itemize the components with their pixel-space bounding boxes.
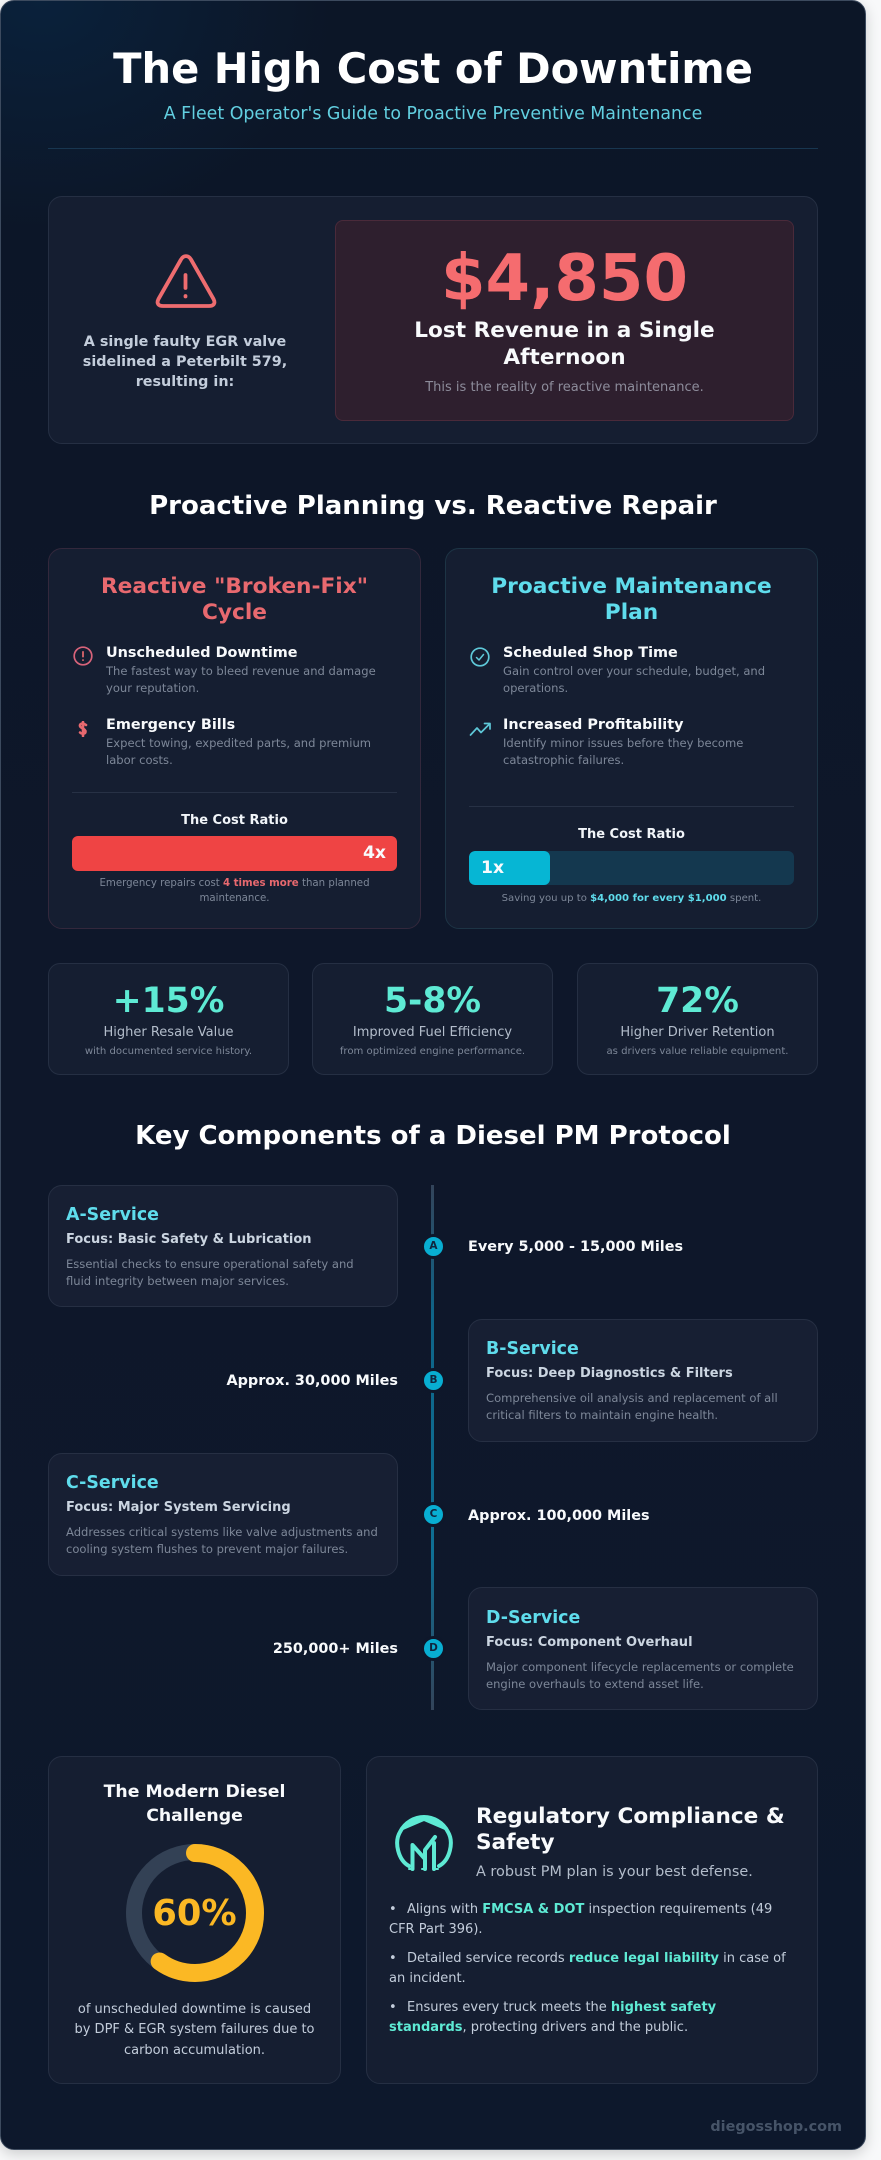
B title: B-Service	[486, 1339, 579, 1359]
C description: cooling system flushes to prevent major failures.	[66, 1542, 348, 1556]
miles C: Approx. 100,000 Miles	[468, 1508, 650, 1524]
donut value: 60%	[152, 1893, 237, 1934]
bar: reactive 4x	[72, 836, 397, 871]
miles D: 250,000+ Miles	[273, 1641, 398, 1657]
node B	[421, 1368, 446, 1393]
retention note: as drivers value reliable equipment.	[606, 1046, 788, 1057]
item: scheduled shop time: Gain control over your schedule, budget, and	[503, 664, 765, 678]
bullet: safety	[389, 2000, 716, 2035]
proactive title	[491, 574, 772, 625]
item: increased profitability: catastrophic failures.	[503, 753, 624, 767]
challenge text: of unscheduled downtime is caused	[78, 2002, 311, 2017]
icon: shield chart	[395, 1815, 453, 1871]
B description: Comprehensive oil analysis and replacement of all	[486, 1390, 778, 1404]
bullet: FMCSA	[389, 1902, 772, 1937]
icon: trend arrow	[470, 722, 491, 736]
A description: fluid integrity between major services.	[66, 1274, 289, 1288]
panel: compliance	[366, 1756, 818, 2084]
item: unscheduled downtime: your reputation.	[106, 681, 199, 695]
icon: alert circle	[73, 646, 93, 666]
heading: PM protocol: Key Components of a Diesel PM Protocol	[135, 1121, 731, 1151]
D title: D-Service	[486, 1608, 580, 1628]
service card C	[48, 1453, 398, 1576]
item: scheduled shop time: operations.	[503, 681, 568, 695]
icon: check circle	[470, 647, 490, 667]
compliance title: Safety	[476, 1830, 555, 1855]
bullet: FMCSA: •	[389, 1902, 397, 1917]
item: increased profitability: Increased Profitability	[503, 717, 683, 733]
item: unscheduled downtime: The fastest way to bleed revenue and damage	[106, 664, 376, 678]
item: emergency bills: labor costs.	[106, 753, 173, 767]
challenge title: The Modern Diesel	[104, 1782, 285, 1802]
stat: retention	[577, 963, 818, 1075]
C title: C-Service	[66, 1473, 159, 1493]
B focus: Focus: Deep Diagnostics & Filters	[486, 1366, 733, 1381]
cost ratio label: The Cost Ratio	[578, 827, 685, 842]
challenge title: Challenge	[146, 1806, 243, 1826]
compliance subtitle: A robust PM plan is your best defense.	[476, 1864, 753, 1880]
stat: fuel	[312, 963, 553, 1075]
bullet: safety: •	[389, 2000, 397, 2015]
reactive caption	[99, 878, 370, 904]
hero case text	[83, 334, 287, 390]
item: increased profitability: Identify minor issues before they become	[503, 736, 743, 750]
footer brand: diegosshop.com	[710, 2119, 842, 2135]
hero case text: resulting in:	[136, 374, 234, 390]
bar: reactive 4x: 4x	[363, 843, 386, 863]
B description: critical filters to maintain engine health.	[486, 1408, 718, 1422]
bullet: liability	[389, 1951, 786, 1986]
hero case text: A single faulty EGR valve	[84, 334, 286, 350]
node A: A	[429, 1240, 438, 1252]
item: emergency bills	[106, 717, 371, 767]
fuel note: from optimized engine performance.	[340, 1046, 525, 1057]
item: increased profitability	[503, 717, 743, 767]
icon: warning triangle	[156, 254, 216, 308]
panel: reactive	[48, 548, 421, 929]
bullet: liability: an incident.	[389, 1971, 466, 1986]
reactive title: Reactive "Broken-Fix"	[101, 574, 368, 599]
service card B	[468, 1319, 818, 1442]
B description	[486, 1390, 778, 1422]
resale note: with documented service history.	[85, 1046, 252, 1057]
compliance list	[389, 1902, 786, 2035]
node B: B	[429, 1374, 438, 1386]
cost ratio label: The Cost Ratio	[181, 813, 288, 828]
retention label: Higher Driver Retention	[620, 1025, 775, 1040]
D description	[486, 1660, 794, 1691]
hero note: This is the reality of reactive maintenance.	[425, 380, 704, 395]
stat: resale	[48, 963, 289, 1075]
bar: proactive 1x: 1x	[481, 858, 504, 878]
proactive title: Plan	[605, 600, 658, 625]
hero label: Lost Revenue in a Single	[414, 318, 715, 343]
challenge text	[74, 2002, 315, 2058]
node C	[421, 1502, 446, 1527]
panel: hero cost	[48, 196, 818, 444]
C focus: Focus: Major System Servicing	[66, 1500, 291, 1515]
node A	[421, 1234, 446, 1259]
bullet: liability: •	[389, 1951, 397, 1966]
miles A: Every 5,000 - 15,000 Miles	[468, 1239, 683, 1255]
D description: engine overhauls to extend asset life.	[486, 1677, 704, 1691]
A focus: Focus: Basic Safety & Lubrication	[66, 1232, 312, 1247]
item: scheduled shop time	[503, 645, 765, 695]
heading: planning vs repair: Proactive Planning vs. Reactive Repair	[149, 491, 717, 521]
challenge text: by DPF & EGR system failures due to	[74, 2022, 315, 2037]
fuel label: Improved Fuel Efficiency	[353, 1025, 512, 1040]
proactive title: Proactive Maintenance	[491, 574, 772, 599]
bullet: safety: Ensures every truck meets the highest safety	[407, 2000, 716, 2015]
service card D	[468, 1587, 818, 1710]
service card A	[48, 1185, 398, 1307]
title: The High Cost of Downtime	[113, 44, 753, 93]
proactive caption: Saving you up to $4,000 for every $1,000 spent.	[502, 893, 761, 904]
reactive caption: Emergency repairs cost 4 times more than planned	[99, 878, 370, 889]
hero label: Afternoon	[503, 344, 626, 370]
D focus: Focus: Component Overhaul	[486, 1635, 693, 1650]
miles B: Approx. 30,000 Miles	[226, 1373, 398, 1389]
item: emergency bills: Emergency Bills	[106, 717, 235, 733]
resale number: +15%	[113, 981, 224, 1021]
retention number: 72%	[656, 981, 739, 1021]
compliance title	[476, 1804, 785, 1855]
reactive caption: maintenance.	[200, 892, 269, 904]
C description: Addresses critical systems like valve adjustments and	[66, 1524, 378, 1538]
challenge title	[104, 1782, 285, 1826]
item: emergency bills: Expect towing, expedited parts, and premium	[106, 736, 371, 750]
panel: lost revenue	[335, 220, 794, 421]
bullet: safety: standards, protecting drivers and the public.	[389, 2020, 688, 2035]
hero label	[414, 318, 715, 370]
item: unscheduled downtime: Unscheduled Downtime	[106, 645, 298, 661]
bullet: FMCSA: Aligns with FMCSA & DOT inspection requirements (49	[407, 1902, 772, 1917]
hero number: $4,850	[441, 242, 688, 316]
node D: D	[429, 1642, 438, 1654]
reactive title	[101, 574, 368, 625]
compliance title: Regulatory Compliance &	[476, 1804, 785, 1829]
challenge text: carbon accumulation.	[124, 2043, 265, 2058]
node C: C	[430, 1508, 437, 1520]
item: unscheduled downtime	[106, 645, 376, 695]
bar: proactive 1x	[469, 851, 794, 885]
donut chart: 60%	[126, 1844, 264, 1982]
panel: proactive	[445, 548, 818, 929]
bullet: liability: Detailed service records reduce legal liability in case of	[407, 1951, 786, 1966]
fuel number: 5-8%	[384, 981, 481, 1021]
resale label: Higher Resale Value	[104, 1025, 233, 1040]
C description	[66, 1524, 378, 1556]
A description	[66, 1256, 354, 1288]
reactive title: Cycle	[202, 600, 267, 625]
D description: Major component lifecycle replacements or complete	[486, 1660, 794, 1674]
panel: diesel challenge	[48, 1756, 341, 2084]
A description: Essential checks to ensure operational safety and	[66, 1256, 354, 1270]
hero case text: sidelined a Peterbilt 579,	[83, 354, 287, 370]
A title: A-Service	[66, 1205, 159, 1225]
icon: dollar	[78, 721, 88, 737]
timeline line	[431, 1185, 434, 1710]
subtitle: A Fleet Operator's Guide to Proactive Preventive Maintenance	[164, 104, 702, 124]
bullet: FMCSA: CFR Part 396).	[389, 1922, 483, 1937]
node D	[421, 1636, 446, 1661]
item: scheduled shop time: Scheduled Shop Time	[503, 645, 678, 661]
